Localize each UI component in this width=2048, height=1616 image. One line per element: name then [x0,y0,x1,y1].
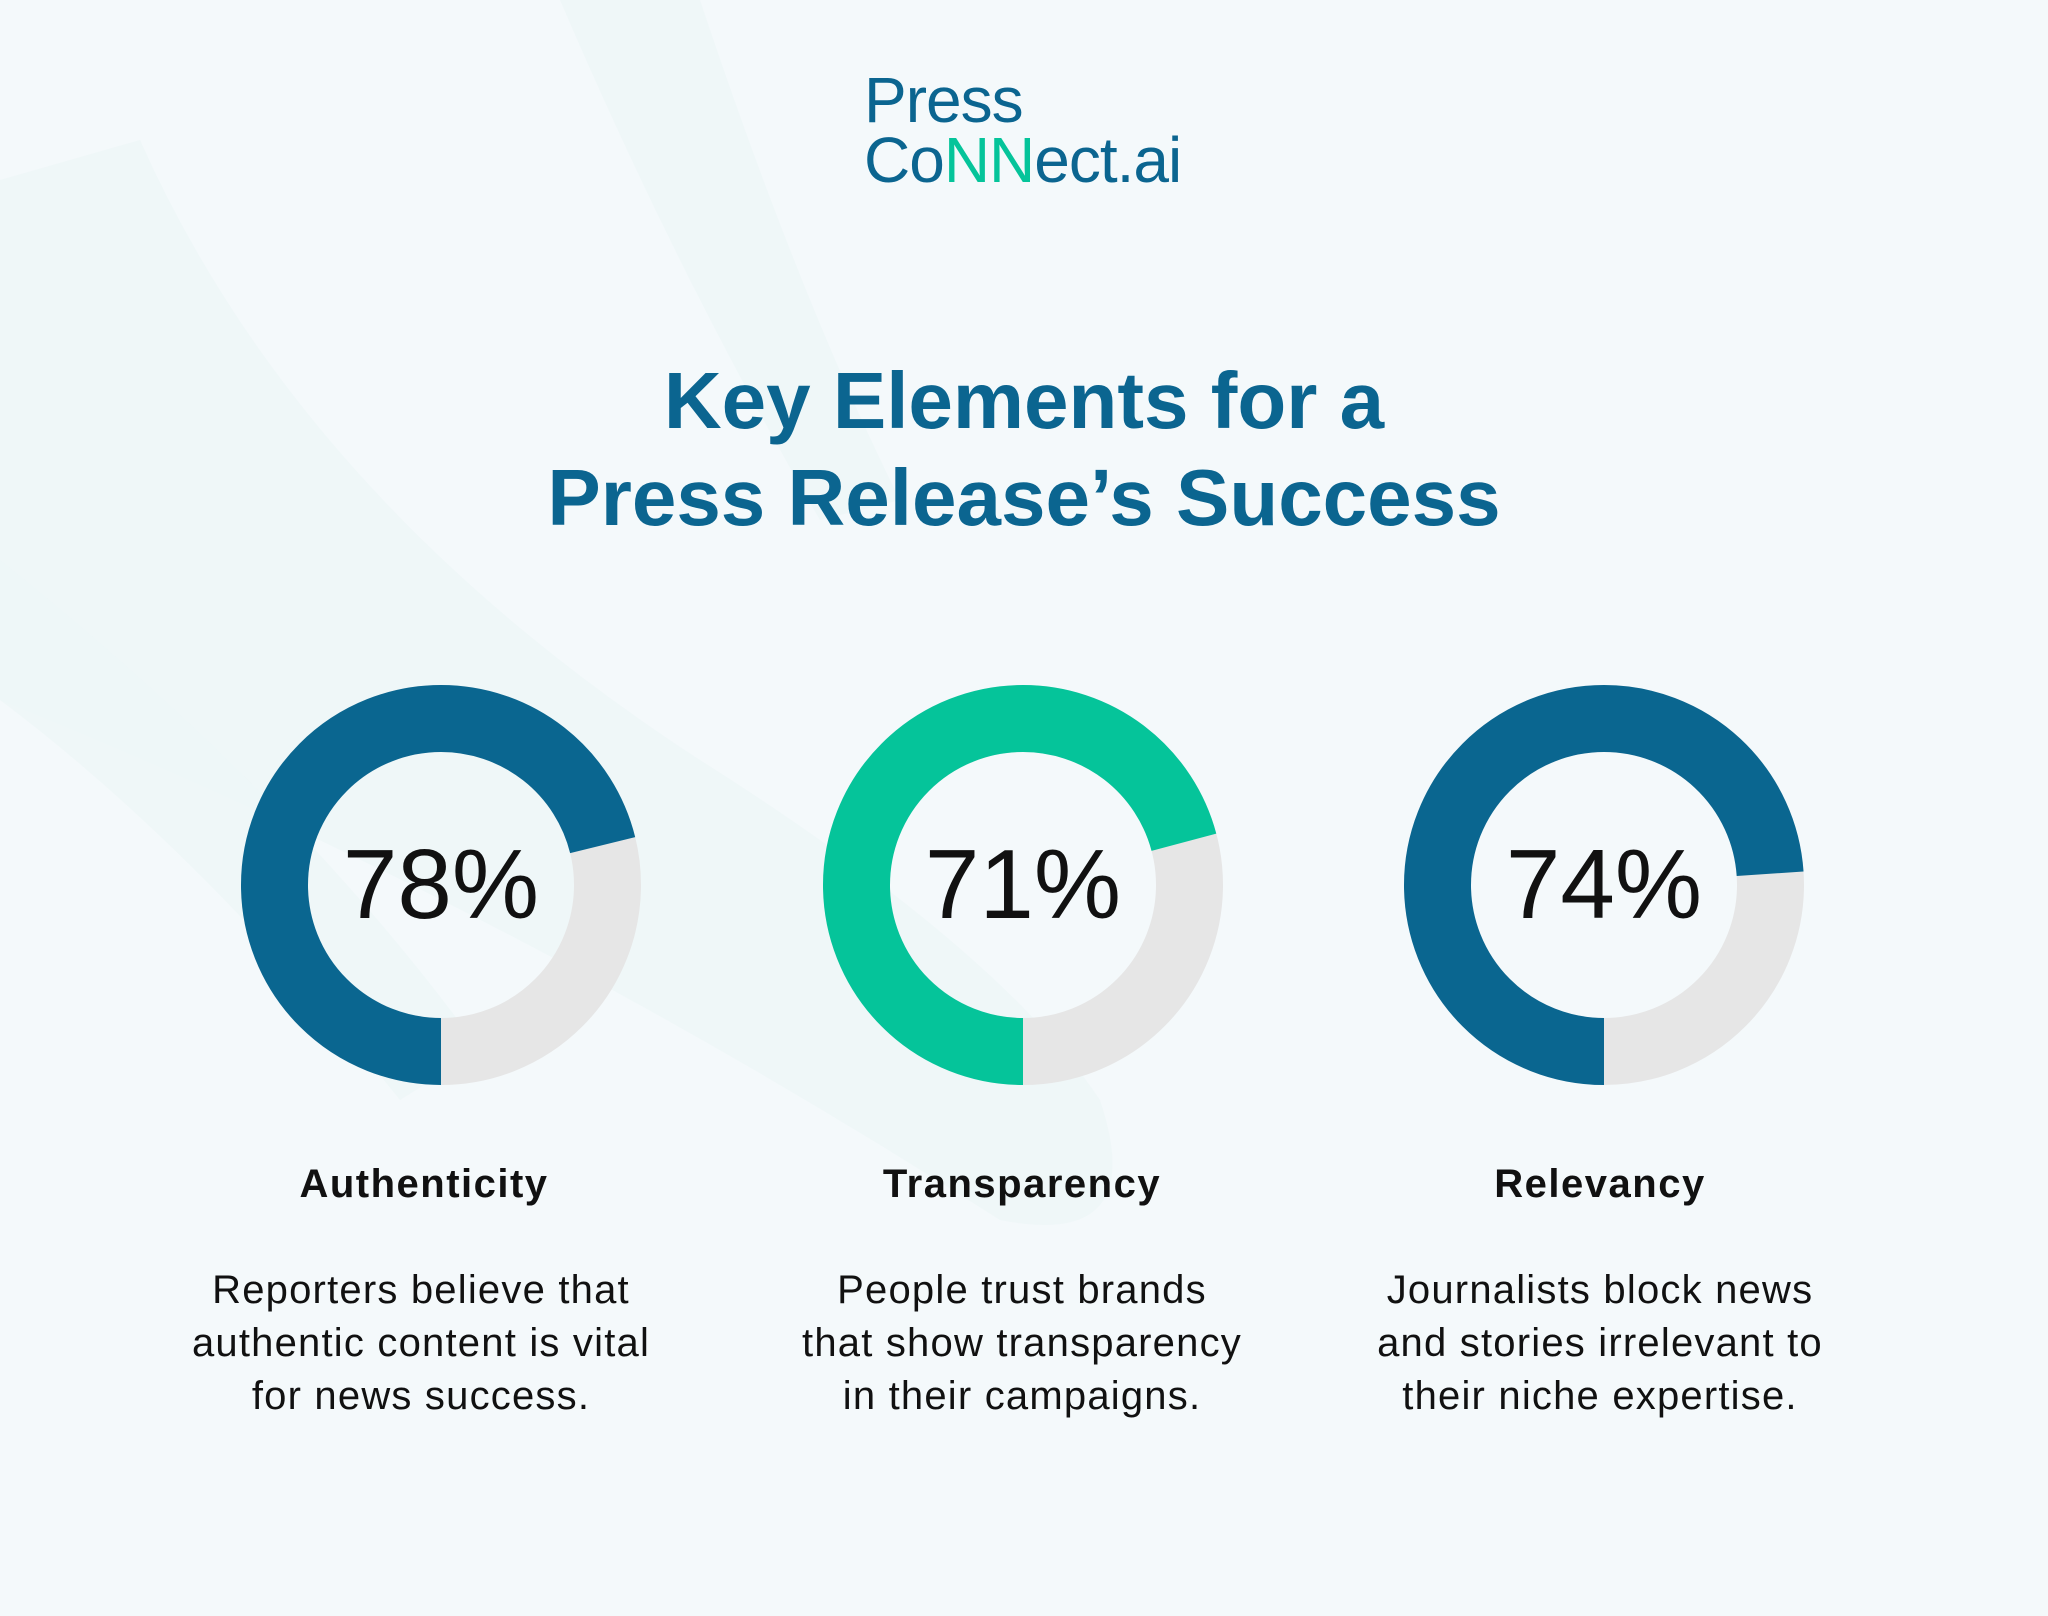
text: authenticity description: authentic content is vital [192,1321,650,1365]
label: Authenticity: Authenticity [299,1162,549,1206]
text: authenticity description: Reporters believe that [212,1268,630,1312]
logo: CoNNect.ai [864,124,1181,196]
text: transparency description [802,1268,1242,1418]
title: Key Elements for a [664,356,1384,445]
text: relevancy description: their niche expertise. [1402,1374,1798,1418]
text: authenticity description: for news success. [252,1374,590,1418]
title [547,356,1501,542]
text: relevancy description: Journalists block news [1387,1268,1813,1312]
text: relevancy description: and stories irrelevant to [1377,1321,1823,1365]
text: transparency description: People trust brands [837,1268,1207,1312]
donut: 78%: 78% [343,829,539,939]
text: transparency description: in their campaigns. [843,1374,1201,1418]
text: relevancy description [1377,1268,1823,1418]
donut: 71%: 71% [925,829,1121,939]
title: Press Release’s Success [547,453,1501,542]
logo [864,64,1181,196]
donut: 74% [1438,718,1770,1052]
label: Transparency: Transparency [883,1162,1161,1206]
donut: 71% [856,718,1190,1052]
logo: Press [864,64,1023,136]
text: transparency description: that show transparency [802,1321,1242,1365]
donut: 74%: 74% [1506,829,1702,939]
text: authenticity description [192,1268,650,1418]
label: Relevancy: Relevancy [1494,1162,1706,1206]
donut: 78% [274,718,608,1052]
